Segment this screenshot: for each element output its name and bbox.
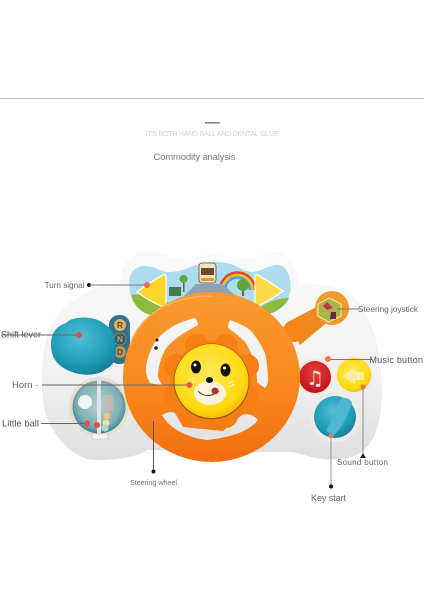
key start knob (310, 392, 360, 442)
sound button (335, 356, 373, 394)
callout: music button (325, 355, 423, 365)
left forest (169, 287, 181, 296)
R N D plate (109, 315, 130, 364)
short heading accent bar (205, 122, 220, 124)
steering wheel (123, 292, 300, 462)
callout: sound button (337, 384, 388, 467)
callout: little ball: Little ball (2, 418, 39, 430)
callout: shift lever: Shift lever (1, 330, 41, 340)
bus (199, 263, 216, 283)
callout: turn signal: Turn signal (44, 280, 85, 290)
right turn signal (255, 275, 283, 306)
steering joystick (283, 291, 349, 345)
shift lever knob (51, 317, 116, 375)
title: Commodity analysis (154, 152, 236, 163)
R N D plate: R (117, 320, 123, 330)
R N D plate: N (117, 334, 123, 344)
callout: steering wheel (130, 418, 177, 487)
toy dashboard illustration (42, 251, 382, 462)
callout: music button: Music button (370, 355, 423, 365)
music button (296, 358, 334, 396)
callout: turn signal (44, 280, 150, 290)
callout: horn: Horn · (12, 380, 38, 391)
center hub petals (164, 334, 259, 428)
callout: little ball (2, 418, 90, 430)
R N D plate: D (117, 347, 123, 357)
rainbow (220, 272, 255, 290)
road (184, 284, 236, 296)
top divider line (0, 98, 424, 99)
scenic panel (129, 262, 290, 318)
rim and spokes with three openings (123, 292, 300, 462)
speaker dots (156, 338, 158, 342)
callout: steering joystick: Steering joystick (358, 304, 419, 314)
callout: key start: Key start (311, 493, 346, 503)
subtitle: IT'S BOTH HAND BALL AND DENTAL GLUE (146, 131, 279, 138)
music button: ♫ (306, 366, 324, 390)
callout: steering wheel: Steering wheel (130, 478, 177, 487)
callout: key start (311, 434, 346, 503)
dashboard body (42, 251, 382, 460)
callout: sound button: Sound button (337, 458, 388, 467)
rainbow tree (242, 288, 244, 296)
little ball (69, 376, 129, 439)
callout: shift lever (1, 330, 82, 340)
lion face (174, 344, 248, 418)
callout: horn (12, 380, 192, 391)
left turn signal (137, 275, 166, 307)
